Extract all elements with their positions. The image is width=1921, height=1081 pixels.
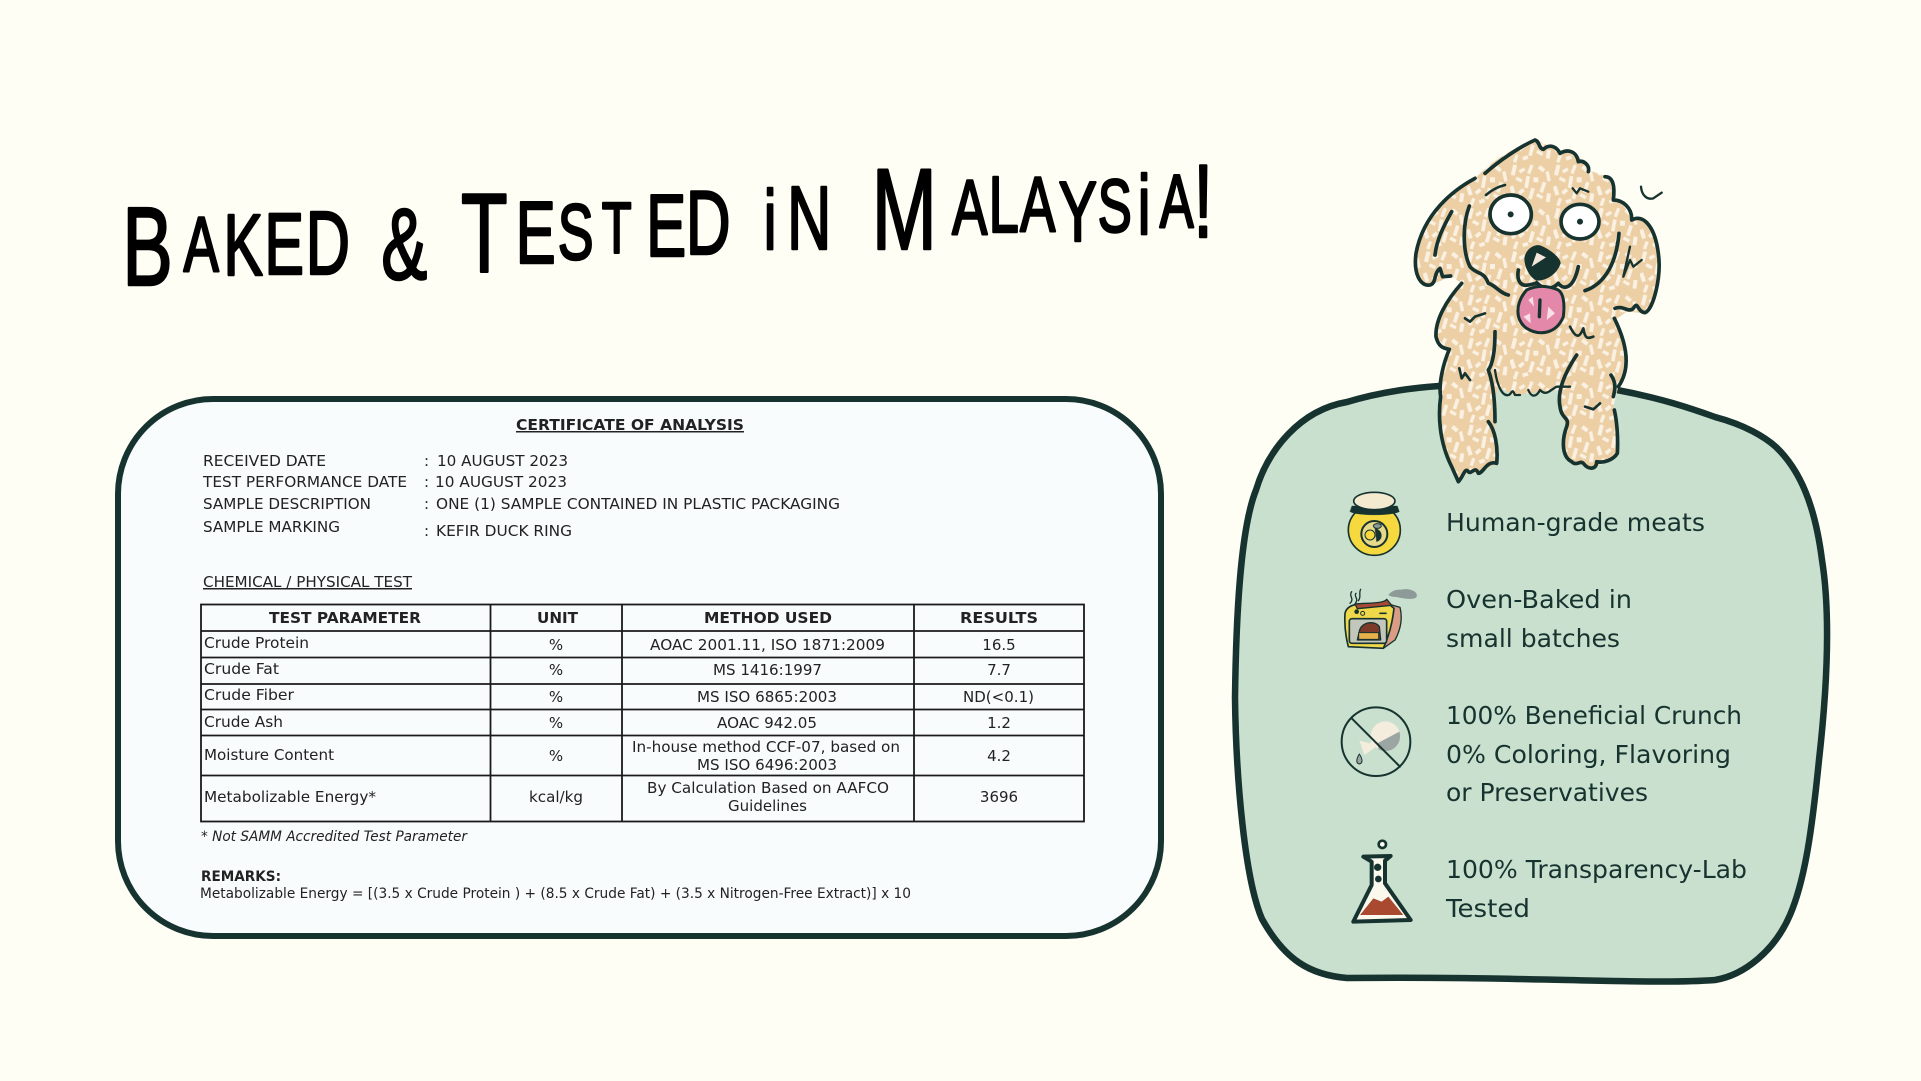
- title: A: [1160, 159, 1194, 243]
- results table: kcal/kg: [529, 788, 583, 806]
- title: A: [1020, 162, 1056, 249]
- remarks: Metabolizable Energy = [(3.5 x Crude Protein ) + (8.5 x Crude Fat) + (3.5 x Nitrogen-Free Extract)] x 10: [200, 886, 911, 902]
- title: S: [558, 189, 594, 277]
- title: T: [602, 189, 632, 269]
- benefit: oven-baked: Oven-Baked in: [1446, 585, 1632, 614]
- title: Y: [1058, 165, 1097, 260]
- benefit: lab tested: 100% Transparency-Lab: [1446, 855, 1747, 884]
- sample details: SAMPLE DESCRIPTION: [203, 495, 371, 513]
- sample details: RECEIVED DATE: [203, 452, 326, 470]
- dog nose: [1525, 246, 1560, 280]
- results table: In-house method CCF-07, based on: [632, 738, 900, 756]
- sample details: KEFIR DUCK RING: [436, 522, 572, 540]
- panel: certificate of analysis: [118, 399, 1161, 936]
- remarks: [200, 869, 911, 902]
- results table: Crude Fiber: [204, 686, 295, 704]
- title: L: [989, 161, 1019, 250]
- title: A: [952, 165, 988, 252]
- sample details: :: [424, 495, 429, 513]
- title: K: [224, 197, 263, 294]
- title: S: [1098, 164, 1132, 248]
- results table: Crude Fat: [204, 660, 279, 678]
- results table: 3696: [980, 788, 1018, 806]
- sample details: ONE (1) SAMPLE CONTAINED IN PLASTIC PACKAGING: [436, 495, 840, 513]
- sample details: SAMPLE MARKING: [203, 518, 340, 536]
- title: E: [646, 176, 686, 275]
- results table: Guidelines: [728, 797, 807, 815]
- icon: no chicken: [1342, 707, 1410, 776]
- benefit icons: [1342, 492, 1417, 922]
- sample details: :: [424, 452, 429, 470]
- title: i: [764, 174, 776, 268]
- results table: %: [549, 636, 563, 654]
- footnote: * Not SAMM Accredited Test Parameter: [201, 829, 468, 845]
- results table: UNIT: [537, 609, 579, 627]
- benefit: lab tested: Tested: [1445, 894, 1530, 923]
- sample details: 10 AUGUST 2023: [435, 473, 567, 491]
- results table: MS ISO 6496:2003: [697, 756, 837, 774]
- results table: TEST PARAMETER: [269, 609, 421, 627]
- results table: Crude Ash: [204, 713, 283, 731]
- panel border: [118, 399, 1161, 936]
- sample details: :: [424, 473, 429, 491]
- title: B: [122, 186, 173, 310]
- icon: oven: [1345, 589, 1417, 648]
- results table: MS 1416:1997: [713, 661, 822, 679]
- results table: AOAC 2001.11, ISO 1871:2009: [650, 636, 885, 654]
- results table: ND(<0.1): [963, 688, 1034, 706]
- benefit: oven-baked: small batches: [1446, 624, 1620, 653]
- benefit: human-grade meats: Human-grade meats: [1446, 508, 1705, 537]
- sample details: 10 AUGUST 2023: [437, 452, 568, 470]
- title: i: [1138, 159, 1150, 253]
- title: N: [787, 168, 831, 269]
- results table: By Calculation Based on AAFCO: [647, 779, 889, 797]
- results table: 7.7: [987, 661, 1011, 679]
- benefit: no additives: or Preservatives: [1446, 778, 1648, 807]
- results table: %: [549, 661, 563, 679]
- results table: Crude Protein: [204, 634, 309, 652]
- title: &: [381, 189, 427, 301]
- results table: 1.2: [987, 714, 1011, 732]
- certificate heading: CERTIFICATE OF ANALYSIS: [516, 416, 744, 434]
- illustration: dog: [1415, 140, 1662, 482]
- title: !: [1193, 142, 1213, 259]
- results table: %: [549, 714, 563, 732]
- results table: RESULTS: [960, 609, 1038, 627]
- section heading: CHEMICAL / PHYSICAL TEST: [203, 573, 413, 591]
- title: M: [872, 145, 937, 274]
- results table: [201, 604, 1084, 822]
- title: E: [516, 183, 556, 282]
- dog eyes: [1490, 195, 1599, 239]
- benefit: lab tested: [1445, 855, 1747, 923]
- results table: METHOD USED: [704, 609, 832, 627]
- benefit list: [1445, 508, 1747, 923]
- remarks: REMARKS:: [201, 869, 281, 885]
- benefit: no additives: 100% Beneficial Crunch: [1446, 701, 1742, 730]
- results table: 4.2: [987, 747, 1011, 765]
- title: D: [686, 173, 731, 274]
- results table: Metabolizable Energy*: [204, 788, 377, 806]
- title: T: [461, 171, 508, 297]
- sample details: [202, 452, 840, 540]
- title: [122, 142, 1213, 310]
- sample details: :: [424, 522, 429, 540]
- results table: Moisture Content: [204, 746, 334, 764]
- results table: %: [549, 688, 563, 706]
- results table: AOAC 942.05: [717, 714, 817, 732]
- dog tongue: [1518, 286, 1564, 333]
- results table: %: [549, 747, 563, 765]
- icon: lab flask: [1353, 841, 1411, 922]
- title: E: [265, 196, 304, 293]
- dog fur: [1415, 140, 1659, 482]
- sample details: TEST PERFORMANCE DATE: [202, 473, 407, 491]
- benefit: oven-baked: [1446, 585, 1632, 653]
- benefit: no additives: 0% Coloring, Flavoring: [1446, 740, 1731, 769]
- title: D: [306, 193, 350, 294]
- dog outlines: [1415, 140, 1662, 482]
- results table: 16.5: [982, 636, 1016, 654]
- panel: product benefits: [1235, 383, 1827, 982]
- results table: MS ISO 6865:2003: [697, 688, 837, 706]
- icon: honey jar: [1348, 492, 1400, 555]
- title: A: [184, 202, 219, 289]
- benefit: no additives: [1446, 701, 1742, 807]
